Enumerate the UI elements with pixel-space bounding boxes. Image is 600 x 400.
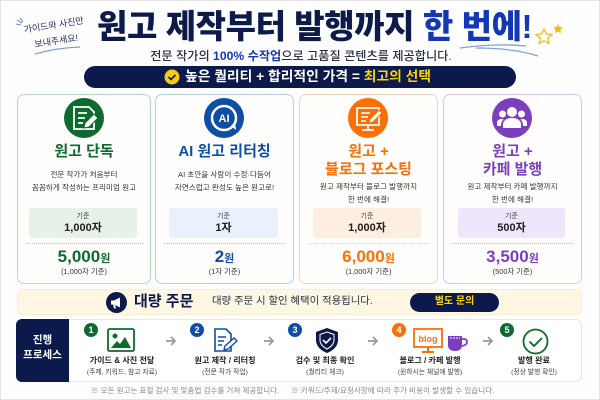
- step 4 note: (원하시는 채널에 발행): [398, 369, 462, 376]
- icon: shield: [316, 328, 338, 353]
- step 5 title: 발행 완료: [518, 356, 550, 365]
- icon: check circle: [522, 328, 548, 354]
- icon: document pencil: [64, 98, 104, 138]
- button: 별도 문의: [410, 293, 499, 312]
- banner pill: [84, 66, 516, 88]
- step number 5: [500, 323, 514, 337]
- panel: process: [16, 319, 582, 382]
- step number 1: [84, 323, 98, 337]
- title underline: [460, 44, 538, 57]
- panel: 원고 + 블로그 포스팅: [299, 94, 438, 284]
- spec value: 1,000자: [348, 222, 386, 234]
- description: [32, 170, 136, 192]
- description: 원고 제작부터 블로그 발행까지: [320, 182, 417, 191]
- price: 2원: [215, 247, 234, 266]
- bulk description: 대량 주문 시 할인 혜택이 적용됩니다.: [212, 296, 373, 307]
- icon: AI bubble: AI: [218, 113, 230, 125]
- description: [320, 182, 417, 204]
- spec value: 500자: [497, 222, 526, 234]
- spec value: 1,000자: [64, 222, 102, 234]
- spec value: 1자: [215, 222, 232, 234]
- description: 원고 제작부터 카페 발행까지: [467, 182, 558, 191]
- step number 4: [392, 323, 406, 337]
- price note: (500자 기준): [493, 267, 532, 276]
- panel: AI 원고 리터칭: [155, 94, 294, 284]
- price: 6,000원: [342, 247, 395, 266]
- note text: 보내주세요!: [34, 33, 79, 49]
- note underline: [34, 46, 80, 55]
- panel: bulk order: [17, 289, 582, 315]
- description: 자연스럽고 완성도 높은 원고로!: [175, 183, 274, 192]
- note text: 가이드와 사진만: [23, 15, 84, 35]
- spec box: [458, 208, 565, 238]
- step number 3: [288, 323, 302, 337]
- process label: 진행: [33, 334, 52, 346]
- heading: AI 원고 리터칭: AI 원고 리터칭: [178, 143, 271, 160]
- icon: blog monitor: [413, 328, 443, 353]
- step 3 title: 검수 및 최종 확인: [296, 356, 354, 365]
- panel: 원고 + 카페 발행: [443, 94, 582, 284]
- heading: 원고 + 카페 발행: 카페 발행: [483, 161, 542, 178]
- description: 전문 작가가 처음부터: [50, 170, 118, 179]
- arrow: [368, 336, 378, 346]
- heading: 원고 + 카페 발행: 원고 +: [492, 143, 533, 160]
- step 4 title: 블로그 / 카페 발행: [399, 356, 461, 365]
- description: 한 번에 해결!: [348, 195, 389, 204]
- footnote: ※ 모든 원고는 표절 검사 및 맞춤법 검수를 거쳐 제공합니다.: [91, 386, 279, 395]
- heading: 원고 + 카페 발행: [483, 143, 542, 178]
- banner text: 높은 퀄리티 + 합리적인 가격 = 최고의 선택: [185, 69, 431, 84]
- spec box: [313, 208, 421, 238]
- subtitle: 전문 작가의 100% 수작업으로 고품질 콘텐츠를 제공합니다.: [150, 49, 452, 63]
- description: [175, 170, 274, 192]
- note ticks: [16, 18, 24, 26]
- step number 2: [190, 323, 204, 337]
- icon: stars: [534, 24, 563, 45]
- bulk heading: 대량 주문: [134, 293, 193, 310]
- handwritten note: [23, 15, 84, 49]
- price note: (1자 기준): [209, 267, 240, 276]
- spec label: 기준: [361, 213, 373, 220]
- icon: blog monitor: blog: [418, 334, 438, 344]
- spec label: 기준: [505, 213, 518, 220]
- button: 별도 문의: 별도 문의: [435, 296, 474, 307]
- step 2 note: (전문 작가 작업): [202, 369, 248, 376]
- spec box: [29, 208, 137, 238]
- step number 1: 1: [88, 325, 94, 335]
- price note: (1,000자 기준): [346, 267, 391, 276]
- spec label: 기준: [217, 213, 230, 220]
- step 1 title: 가이드 & 사진 전달: [90, 356, 154, 365]
- arrow: [483, 336, 493, 346]
- icon: monitor pencil: [348, 98, 388, 138]
- icon: image: [107, 328, 135, 352]
- note text: [23, 15, 84, 49]
- panel: 원고 단독: [17, 94, 151, 284]
- heading: 원고 단독: 원고 단독: [54, 143, 114, 160]
- step number 2: 2: [194, 325, 200, 335]
- description: AI 초안을 사람이 수정·다듬어: [178, 170, 271, 179]
- icon: coffee cup: [448, 336, 468, 351]
- step 5 note: (정상 발행 확인): [511, 369, 557, 376]
- arrow: [264, 336, 274, 346]
- price note: (1,000자 기준): [61, 267, 107, 276]
- process label: 프로세스: [23, 349, 62, 361]
- step 2 title: 원고 제작 / 리터칭: [194, 356, 256, 365]
- icon: check badge: [164, 70, 180, 84]
- price: 3,500원: [486, 247, 539, 266]
- heading: 원고 + 블로그 포스팅: [325, 143, 412, 178]
- step 1 note: (주제, 키워드, 참고 자료): [87, 369, 157, 376]
- heading: 원고 + 블로그 포스팅: 블로그 포스팅: [325, 161, 412, 178]
- spec box: [169, 208, 278, 238]
- description: [467, 182, 558, 204]
- icon: people: [492, 98, 532, 138]
- icon: document pencil: [214, 328, 238, 352]
- price: 5,000원: [58, 247, 110, 266]
- step number 5: 5: [504, 325, 510, 335]
- icon: megaphone: [106, 292, 127, 313]
- spec label: 기준: [77, 213, 89, 220]
- title: 원고 제작부터 발행까지 한 번에!: [97, 8, 532, 45]
- step number 3: 3: [292, 325, 298, 335]
- arrow: [166, 336, 176, 346]
- description: 한 번에 해결!: [492, 195, 533, 204]
- icon: AI bubble: [204, 98, 244, 138]
- description: 꼼꼼하게 작성하는 프리미엄 원고: [32, 183, 136, 192]
- process label: [16, 319, 69, 382]
- heading: 원고 + 블로그 포스팅: 원고 +: [348, 143, 389, 160]
- step number 4: 4: [396, 325, 402, 335]
- step 3 note: (퀄리티 체크): [306, 369, 344, 376]
- footnote: ※ 키워드/주제/요청사항에 따라 추가 비용이 발생할 수 있습니다.: [291, 386, 494, 395]
